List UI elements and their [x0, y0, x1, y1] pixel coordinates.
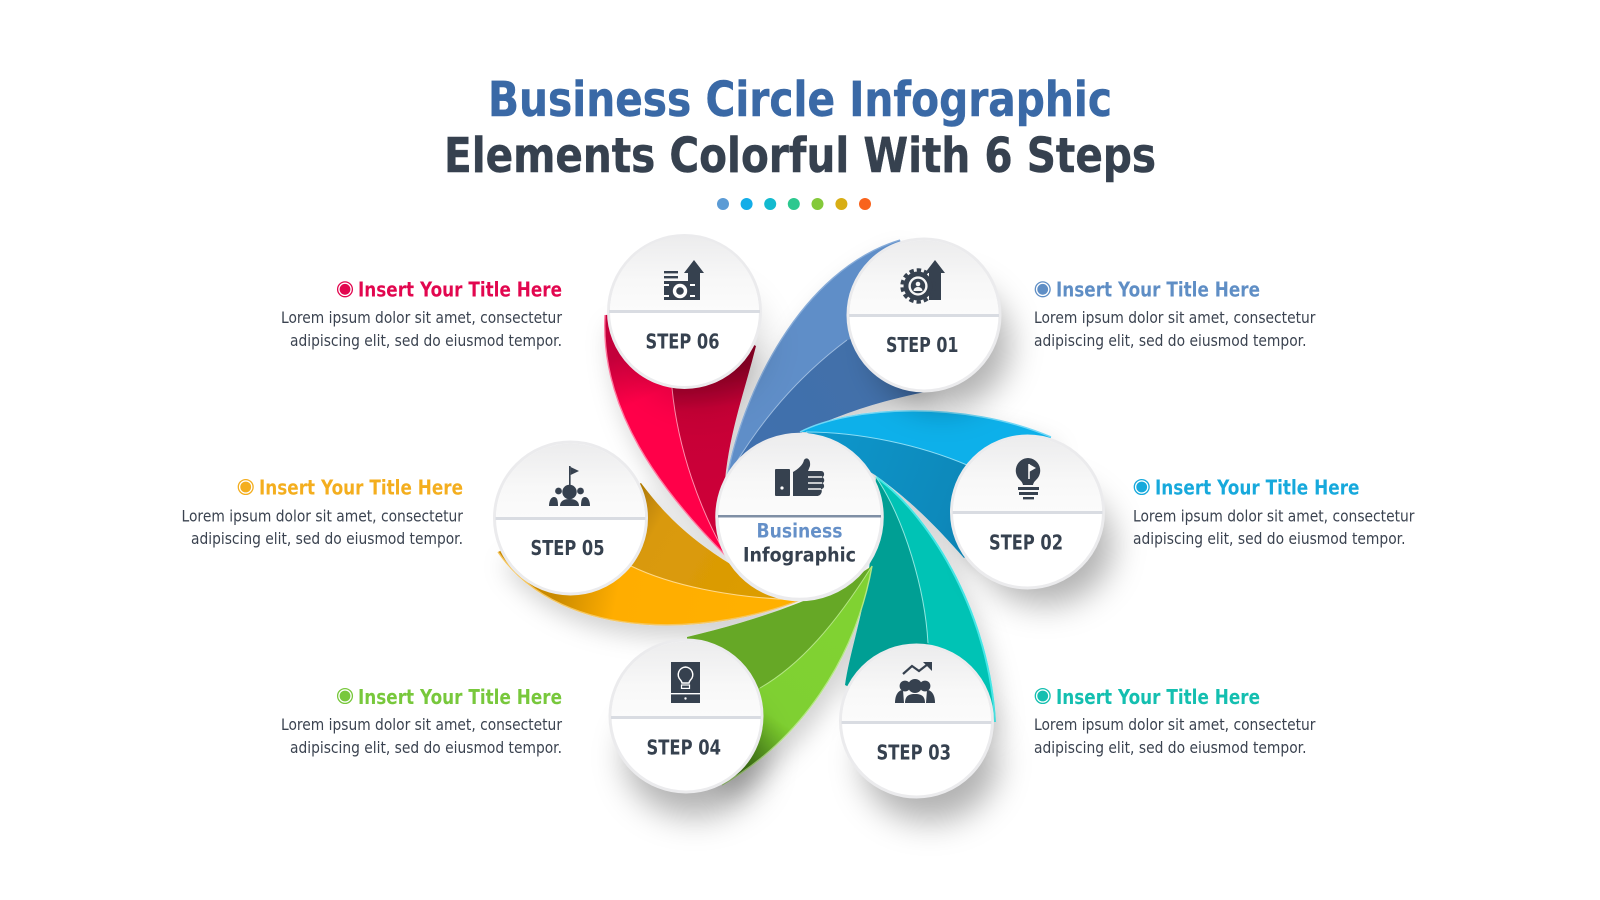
icon: thumbs up	[775, 458, 824, 496]
text block: step 02: Lorem ipsum dolor sit amet, consectetur	[1133, 506, 1415, 526]
circle: step 05	[494, 442, 646, 594]
title: Business Circle Infographic	[488, 72, 1112, 128]
text block: step 03: Insert Your Title Here	[1056, 685, 1260, 709]
circle: step 03	[840, 645, 992, 797]
circle: step 01	[848, 239, 1000, 391]
bullet	[338, 282, 352, 297]
label: step 06: STEP 06	[646, 330, 720, 354]
text block: step 02: adipiscing elit, sed do eiusmod tempor.	[1133, 529, 1406, 548]
text block: step 05: adipiscing elit, sed do eiusmod tempor.	[191, 529, 463, 548]
swirl of six colored ribbons	[498, 240, 1051, 785]
circle: step 06	[608, 236, 760, 388]
ribbon: step 02 cyan	[800, 411, 1051, 558]
icon: tablet with bulb	[671, 662, 700, 703]
text block: step 06: adipiscing elit, sed do eiusmod tempor.	[290, 331, 562, 350]
title: Elements Colorful With 6 Steps	[444, 128, 1156, 184]
circle: center	[717, 434, 882, 600]
circle shadows	[625, 281, 1113, 822]
text block: step 04: Insert Your Title Here	[358, 685, 562, 709]
text block: step 03	[1034, 685, 1316, 757]
label: step 05: STEP 05	[530, 536, 604, 560]
circle: step 02	[952, 436, 1104, 588]
bullet	[238, 480, 253, 494]
bullet	[1035, 282, 1050, 297]
ribbon: step 06 red	[605, 311, 756, 557]
icon: gear with up arrow	[902, 260, 945, 302]
text block: step 01	[1034, 278, 1316, 350]
ribbon: step 03 teal	[845, 477, 995, 722]
circle: step 04	[610, 640, 762, 792]
text block: step 05	[182, 476, 463, 548]
icon: money with up arrow	[664, 260, 704, 300]
text block: step 04	[281, 685, 562, 757]
text block: step 01: Lorem ipsum dolor sit amet, consectetur	[1034, 308, 1316, 327]
text block: step 06: Insert Your Title Here	[358, 278, 562, 302]
label: step 01: STEP 01	[886, 333, 958, 357]
bullet	[1134, 480, 1149, 494]
text block: step 06	[281, 278, 562, 350]
icon: team with flag	[549, 466, 590, 506]
label: step 03: STEP 03	[876, 740, 951, 764]
text block: step 06: Lorem ipsum dolor sit amet, consectetur	[281, 308, 562, 327]
icon: team with growth arrow	[895, 662, 935, 703]
text block: step 02: Insert Your Title Here	[1155, 476, 1360, 500]
icon: light bulb with flag	[1016, 458, 1040, 499]
text block: step 03: Lorem ipsum dolor sit amet, consectetur	[1034, 715, 1316, 734]
bullet	[338, 689, 352, 703]
text block: step 04: Lorem ipsum dolor sit amet, consectetur	[281, 715, 562, 734]
ribbon: step 01 blue	[727, 240, 925, 478]
label: step 02: STEP 02	[989, 530, 1063, 554]
bullet	[1035, 689, 1050, 703]
text block: step 03: adipiscing elit, sed do eiusmod tempor.	[1034, 738, 1306, 757]
ribbon: step 04 green	[686, 566, 872, 785]
label: step 04: STEP 04	[646, 736, 721, 760]
title	[444, 72, 1156, 184]
label: center title: Business	[756, 520, 842, 542]
text block: step 01: adipiscing elit, sed do eiusmod tempor.	[1034, 331, 1306, 350]
text block: step 02	[1133, 476, 1415, 548]
text block: step 04: adipiscing elit, sed do eiusmod tempor.	[290, 738, 562, 757]
text block: step 01: Insert Your Title Here	[1056, 278, 1260, 302]
text block: step 05: Lorem ipsum dolor sit amet, consectetur	[182, 506, 463, 526]
text block: step 05: Insert Your Title Here	[259, 476, 463, 500]
ribbon: step 05 orange	[498, 483, 800, 625]
circle: center: Infographic	[743, 544, 856, 566]
decorative colored dots row	[717, 198, 871, 210]
